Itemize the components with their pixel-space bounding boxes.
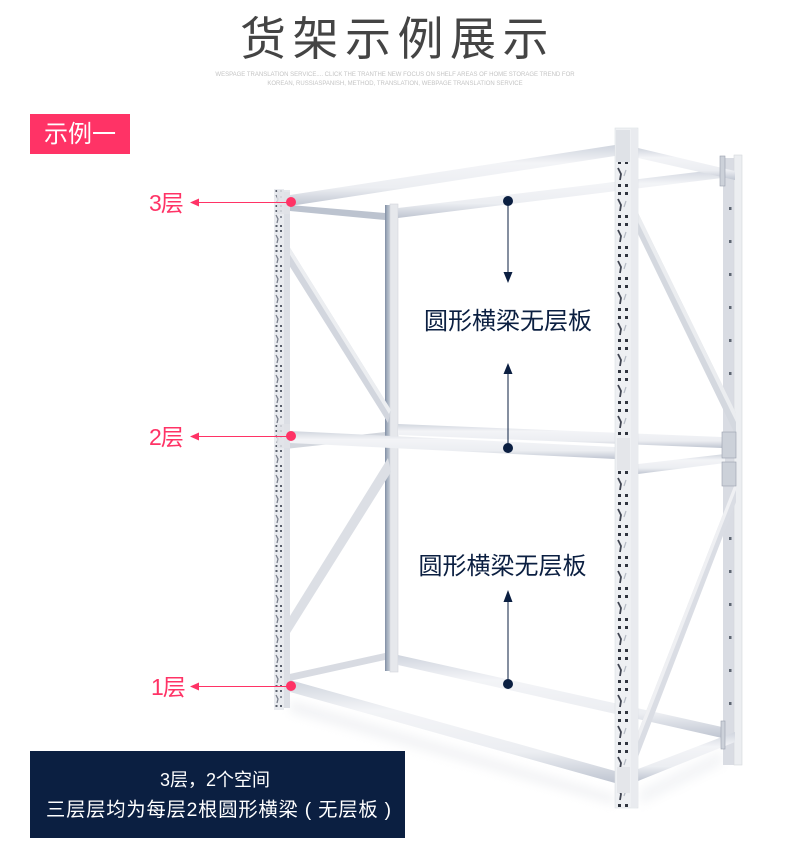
right connector plates — [720, 156, 736, 749]
upper span label: 圆形横梁无层板 — [424, 308, 592, 335]
subtitle small print — [215, 72, 575, 87]
front-right post — [615, 128, 638, 808]
arrow: bottom beam up — [503, 590, 513, 689]
summary panel: 三层层均为每层2根圆形横梁 ( 无层板 ) — [46, 799, 391, 821]
back-left post — [385, 204, 398, 672]
back-right post — [723, 155, 742, 765]
tag: example one: 示例一 — [44, 121, 116, 148]
right side beams — [638, 148, 735, 781]
summary panel: 3层，2个空间 — [160, 770, 270, 790]
level marker: 2层 — [149, 424, 296, 450]
level marker: 1层 — [151, 674, 296, 700]
arrow: middle beam up — [503, 363, 513, 453]
title: 货架示例展示 — [240, 13, 555, 65]
left side beams — [285, 205, 385, 682]
left diagonal braces — [285, 243, 391, 641]
front-left post — [274, 189, 290, 710]
level marker: 2层: 2层 — [149, 424, 183, 450]
arrow: top beam down — [503, 196, 513, 283]
shelf rack illustration — [274, 128, 742, 808]
front beams — [290, 145, 615, 783]
tag: example one — [30, 114, 130, 154]
level marker: 3层: 3层 — [149, 190, 183, 216]
level marker: 1层: 1层 — [151, 674, 185, 700]
level marker: 3层 — [149, 190, 296, 216]
summary panel — [30, 751, 405, 838]
back beams — [398, 169, 722, 738]
right diagonal braces — [638, 213, 736, 757]
floor shadows — [290, 700, 722, 805]
subtitle small print: KOREAN, RUSSIASPANISH, METHOD, TRANSLATION, WEBPAGE TRANSLATION SERVICE — [267, 81, 523, 87]
lower span label: 圆形横梁无层板 — [418, 553, 586, 580]
subtitle small print: WESPAGE TRANSLATION SERVICE.... CLICK THE TRANTHE NEW FOCUS ON SHELF AREAS OF HOME STORAGE TREND FOR — [215, 72, 575, 78]
